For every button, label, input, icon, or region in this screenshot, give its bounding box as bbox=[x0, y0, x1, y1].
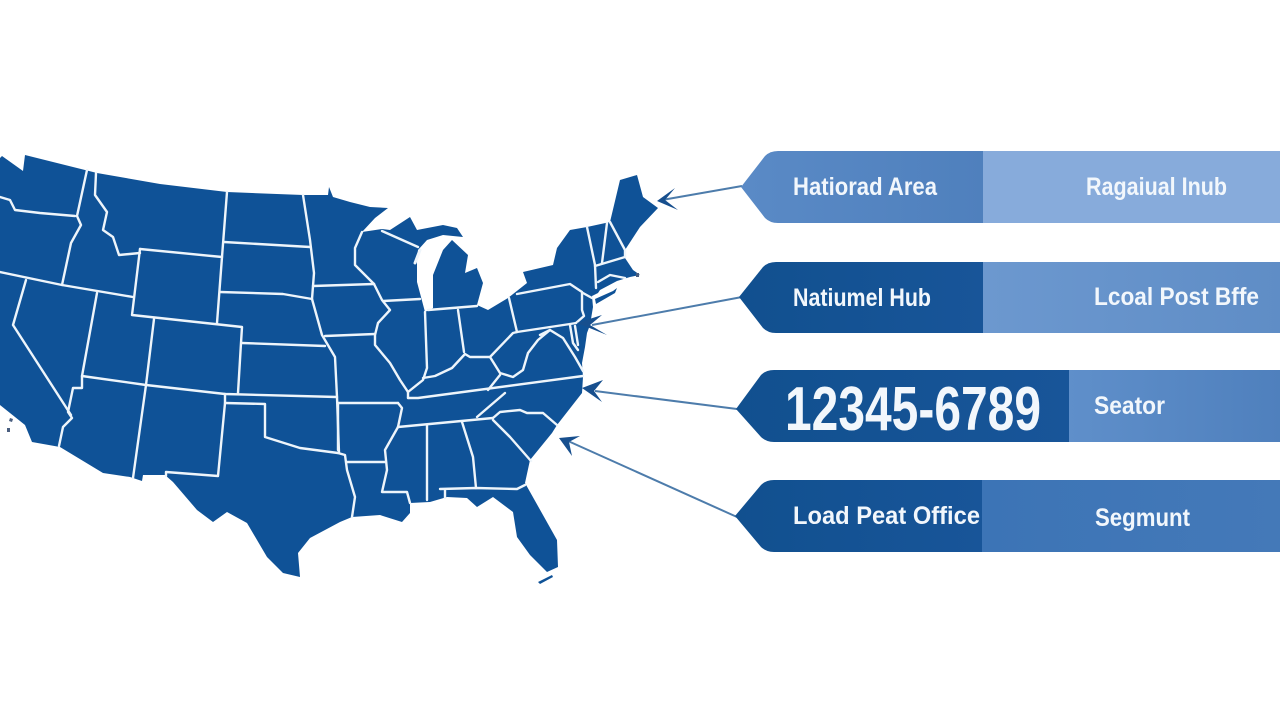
label: Regional Hub: Ragaiual Inub bbox=[1086, 173, 1227, 201]
arrow: National Area to Maine bbox=[657, 186, 742, 210]
map landmass bbox=[0, 155, 658, 577]
label: Local Post Office: Load Peat Office bbox=[793, 502, 980, 530]
banner row 3 bbox=[736, 370, 1280, 444]
Long Island and Florida Keys bbox=[538, 288, 617, 584]
label: National Hub: Natiumel Hub bbox=[793, 284, 931, 312]
Channel islands and Cape islands bbox=[7, 273, 639, 432]
banner segment: Segment bbox=[982, 480, 1280, 552]
banner segment: ZIP code bbox=[736, 370, 1069, 442]
banner segment: Regional Hub bbox=[983, 151, 1280, 223]
banner row 4 bbox=[735, 480, 1280, 552]
label: ZIP code number: 12345-6789 bbox=[785, 375, 1041, 444]
banner row 1 bbox=[741, 151, 1280, 223]
arrow: National Hub to New Jersey bbox=[577, 297, 742, 335]
banner segment: Local Post Office bbox=[983, 262, 1280, 333]
label: National Area: Hatiorad Area bbox=[793, 173, 938, 201]
label: Segment: Segmunt bbox=[1095, 504, 1191, 532]
arrow: ZIP code to North Carolina bbox=[582, 380, 737, 409]
banner segment: Sector bbox=[1069, 370, 1280, 442]
label: Local Post Office: Lcoal Post Bffe bbox=[1094, 283, 1259, 311]
banner segment: National Area bbox=[741, 151, 983, 223]
state borders bbox=[0, 170, 625, 517]
map of the United States bbox=[0, 155, 658, 584]
banner row 2 bbox=[739, 262, 1280, 333]
arrow: Local Post Office to South Carolina bbox=[559, 436, 737, 517]
banner segment: National Hub bbox=[739, 262, 983, 333]
banner segment: Local Post Office bbox=[735, 480, 982, 552]
label: Sector: Seator bbox=[1094, 392, 1165, 420]
